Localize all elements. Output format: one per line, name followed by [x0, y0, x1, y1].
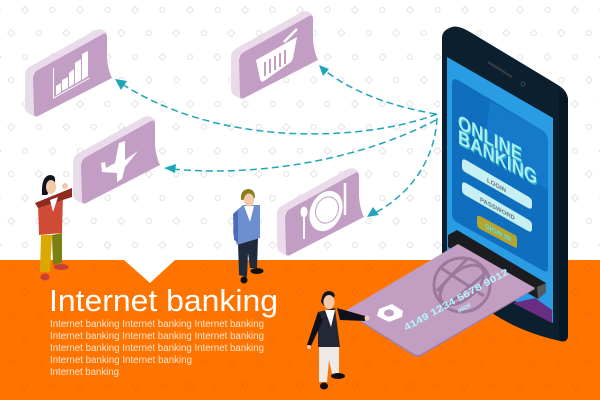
- body text block: Internet banking Internet banking Internet banking: [50, 342, 264, 354]
- dashed arrows from phone to bubbles: [115, 65, 437, 217]
- login field: LOGIN: [487, 177, 506, 195]
- phone screen: [447, 57, 553, 323]
- phone body: [442, 27, 568, 341]
- speaker: [488, 62, 512, 77]
- sign in button: SIGN IN: [485, 221, 511, 244]
- heading: online banking: ONLINE: [458, 110, 522, 167]
- screen inner panel: [452, 79, 548, 272]
- title: Internet banking: [49, 283, 278, 318]
- card slot: [448, 230, 546, 299]
- purple lower screen band: [513, 298, 552, 323]
- heading: online banking: ONLINE: [459, 112, 523, 169]
- person: man in blue jacket: [233, 189, 264, 284]
- person: woman pointing: [35, 175, 72, 280]
- body text block: Internet banking: [50, 366, 119, 378]
- speech bubble: plate and cutlery: [277, 168, 364, 256]
- speech bubble: chart: [25, 29, 112, 117]
- globe emblem: [433, 258, 491, 312]
- password field: PASSWORD: [480, 196, 515, 222]
- white hex logo: [377, 304, 403, 322]
- sign in button: [477, 216, 517, 248]
- icon: basket: [256, 29, 297, 82]
- credit card: [345, 244, 535, 357]
- speech bubble: plane: [73, 116, 160, 204]
- card number: 4149 1234 5678 9012: [402, 267, 511, 334]
- password field: [462, 182, 532, 232]
- icon: plate, spoon and knife: [300, 183, 349, 239]
- smartphone: [442, 27, 568, 341]
- camera: [521, 82, 525, 86]
- body text block: Internet banking Internet banking Internet banking: [50, 318, 264, 330]
- person: man pointing at card: [307, 291, 370, 390]
- speech bubble: shopping basket: [231, 11, 318, 99]
- body text block: [50, 318, 264, 378]
- card date: 08/28: [457, 303, 472, 315]
- body text block: Internet banking Internet banking: [50, 354, 192, 366]
- login field: [462, 159, 532, 209]
- icon: plane: [101, 141, 138, 182]
- heading: online banking: BANKING: [459, 127, 538, 192]
- orange ground band with notch: [0, 260, 600, 400]
- icon: bar chart: [54, 51, 90, 98]
- heading: online banking: BANKING: [458, 125, 537, 190]
- body text block: Internet banking Internet banking Internet banking: [50, 330, 264, 342]
